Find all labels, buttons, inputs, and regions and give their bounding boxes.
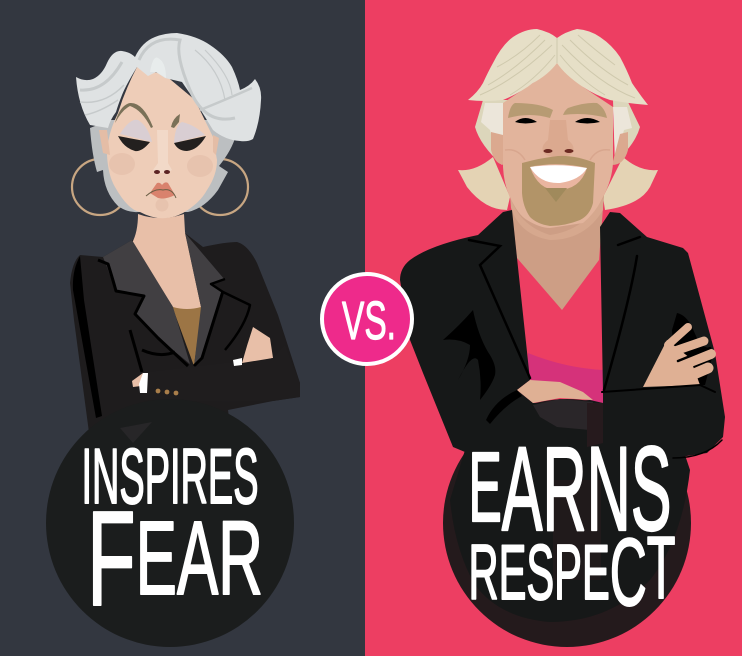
panel: left dark background <box>0 0 365 656</box>
soul patch <box>545 188 567 202</box>
nose <box>542 120 574 158</box>
sleeve buttons <box>156 389 178 395</box>
left lapel <box>103 240 190 364</box>
eyeshadow <box>120 120 205 143</box>
chin <box>156 198 168 212</box>
palm <box>643 340 700 387</box>
infographic canvas: INSPIRES <box>82 432 258 520</box>
ring finger <box>680 354 711 366</box>
jacket left panel <box>400 210 603 452</box>
beard <box>522 156 595 226</box>
hair top <box>468 29 648 105</box>
cheeks <box>109 153 213 177</box>
white cuffs <box>139 358 242 393</box>
earrings <box>72 159 248 215</box>
versus badge <box>322 274 412 364</box>
closed eyes <box>118 136 206 151</box>
jacket hem through ball <box>450 440 690 622</box>
lower lip <box>530 164 587 190</box>
versus text: VS. <box>342 291 396 351</box>
little finger <box>680 368 708 380</box>
teeth smile <box>530 165 587 183</box>
nostrils <box>154 170 170 174</box>
sleeve shadow <box>533 399 593 430</box>
middle finger <box>672 341 704 352</box>
badge circle: right slogan ball <box>443 399 691 647</box>
nose <box>153 130 172 173</box>
neck stubble <box>510 195 603 240</box>
side hair back <box>475 100 640 165</box>
eyes <box>515 118 600 124</box>
right lapel <box>185 233 225 366</box>
heading: respect: RESPE <box>468 528 610 616</box>
character: man with crossed arms <box>400 29 725 458</box>
neck <box>132 214 201 309</box>
forehead highlight <box>150 58 166 78</box>
jacket <box>70 214 300 440</box>
lips <box>150 182 175 199</box>
jacket lines <box>469 237 722 458</box>
jacket body <box>70 233 300 440</box>
jacket shadow through ball <box>120 422 152 443</box>
mouth line <box>146 190 176 198</box>
badge circle: left slogan ball <box>46 399 294 647</box>
heading: respect: T <box>647 518 676 617</box>
ears <box>99 130 219 155</box>
eyebrows <box>115 103 180 128</box>
right hand finger shadows <box>672 313 714 385</box>
face <box>503 60 613 228</box>
heading: fear: EAR <box>136 500 263 617</box>
heading: earns: E <box>468 432 502 542</box>
character: woman with crossed arms <box>70 33 300 440</box>
cheek lines <box>505 150 610 160</box>
face <box>107 67 217 218</box>
neck <box>510 195 604 310</box>
left hand <box>517 380 593 403</box>
right hand <box>242 327 273 363</box>
panel: right pink background <box>365 0 742 656</box>
right hand <box>643 327 711 387</box>
black sleeve shadow <box>73 256 102 418</box>
finger gap <box>678 348 710 361</box>
long back hair flaps <box>458 157 658 210</box>
shirt shading <box>528 353 603 404</box>
jacket right panel <box>600 212 725 458</box>
shirt <box>172 306 202 366</box>
hair strands <box>80 39 252 119</box>
heading: respect: C <box>610 519 647 626</box>
heading: fear: F <box>87 483 136 634</box>
hair top <box>76 33 261 141</box>
sleeve stripe <box>587 403 603 447</box>
hair strands <box>480 35 635 98</box>
lapel edges <box>98 260 250 372</box>
ears <box>491 132 628 165</box>
back hair <box>90 120 236 212</box>
nostrils <box>544 149 574 153</box>
side hair front <box>481 103 632 163</box>
crossed forearm <box>140 345 300 402</box>
left hand <box>132 373 143 387</box>
eyebrows <box>508 103 607 118</box>
shaded strip through ball <box>553 480 601 580</box>
index finger <box>668 327 688 345</box>
jacket creases <box>443 310 522 424</box>
